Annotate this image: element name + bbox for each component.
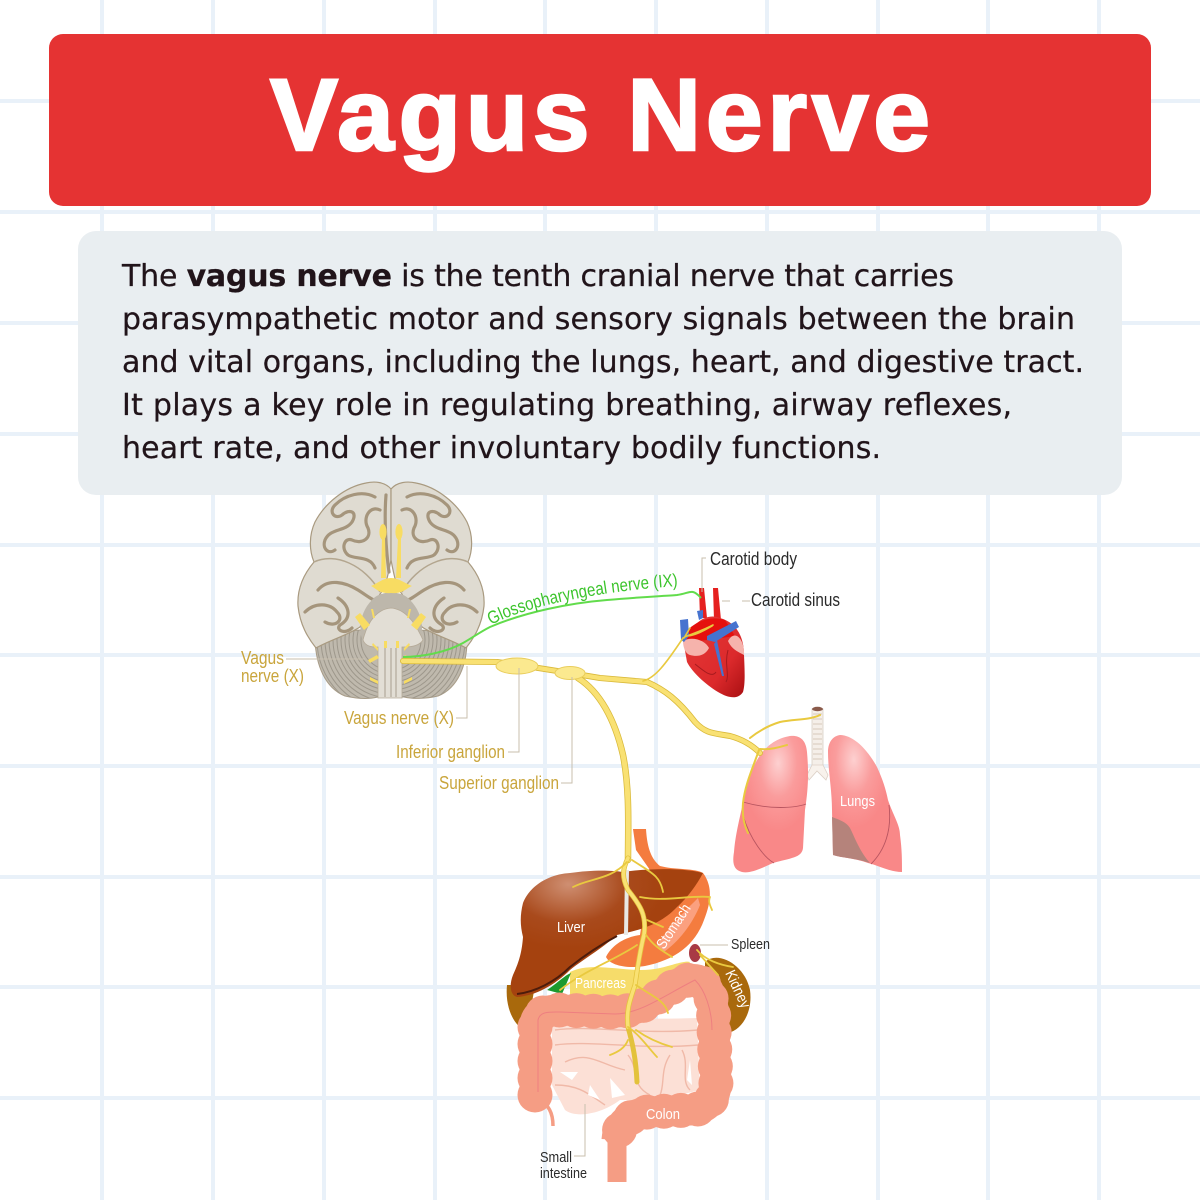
cerebrum right hemisphere bbox=[391, 482, 484, 648]
trachea bbox=[807, 707, 828, 780]
labels: vagus nerve system: Inferior ganglion bbox=[396, 742, 505, 762]
cranial nerves in yellow bbox=[355, 524, 426, 684]
panel: description bbox=[78, 231, 1122, 495]
labels: black organ labels: Small bbox=[540, 1149, 572, 1166]
labels: white organ labels: Colon bbox=[646, 1106, 680, 1123]
labels: white organ labels: Lungs bbox=[840, 793, 875, 810]
illustration: brain bbox=[298, 482, 484, 718]
pancreas bbox=[570, 962, 690, 1004]
inferior ganglion bbox=[496, 658, 538, 674]
nerve: vagus main trunk and branches bbox=[403, 625, 820, 1082]
labels: black organ labels bbox=[540, 549, 840, 1182]
labels: black organ labels: Carotid sinus bbox=[751, 590, 840, 610]
left lung bbox=[733, 736, 808, 872]
brainstem bbox=[363, 608, 423, 698]
digestive organs bbox=[507, 829, 750, 1182]
description text: parasympathetic motor and sensory signals between the brain bbox=[122, 302, 1075, 337]
label: glossopharyngeal nerve: Glossopharyngeal nerve (IX) bbox=[488, 573, 677, 623]
labels: white organ labels: Stomach bbox=[653, 901, 695, 952]
labels: vagus nerve system: Vagus nerve (X) bbox=[344, 708, 454, 728]
description text: and vital organs, including the lungs, heart, and digestive tract. bbox=[122, 345, 1084, 380]
gut trunk bbox=[624, 858, 645, 1082]
nerve: glossopharyngeal bbox=[403, 592, 701, 657]
gallbladder bbox=[547, 973, 571, 994]
labels: white organ labels: Pancreas bbox=[575, 975, 626, 992]
superior ganglion bbox=[555, 666, 585, 680]
labels: vagus nerve system: Superior ganglion bbox=[439, 773, 559, 793]
labels: vagus nerve system bbox=[241, 648, 559, 793]
heart atria bbox=[683, 635, 744, 656]
leader lines bbox=[286, 558, 750, 1156]
colon bbox=[535, 980, 716, 1182]
kidneys bbox=[507, 958, 750, 1033]
cerebellum bbox=[315, 630, 468, 699]
description text: heart rate, and other involuntary bodily functions. bbox=[122, 431, 881, 466]
labels: vagus nerve system: Vagus bbox=[241, 648, 284, 668]
hepatic vessel bbox=[626, 870, 627, 935]
title: Vagus Nerve bbox=[270, 58, 930, 172]
labels: black organ labels: intestine bbox=[540, 1165, 587, 1182]
right lung bbox=[828, 735, 902, 872]
labels: vagus nerve system: nerve (X) bbox=[241, 666, 304, 686]
labels: black organ labels: Spleen bbox=[731, 936, 770, 953]
labels: white organ labels bbox=[557, 793, 875, 1123]
labels: white organ labels: Kidney bbox=[721, 968, 754, 1011]
lungs bbox=[733, 707, 902, 872]
labels: black organ labels: Carotid body bbox=[710, 549, 797, 569]
cerebrum left hemisphere bbox=[298, 482, 391, 648]
carotid arteries bbox=[699, 588, 721, 620]
heart bbox=[680, 588, 745, 697]
title banner bbox=[49, 34, 1151, 206]
small intestine bbox=[552, 1018, 700, 1114]
liver bbox=[511, 869, 703, 997]
spleen bbox=[689, 944, 701, 962]
description text bbox=[121, 259, 1084, 466]
stomach bbox=[606, 829, 710, 967]
vagus trunk outline bbox=[403, 661, 760, 753]
description text: The vagus nerve is the tenth cranial nerve that carries bbox=[121, 259, 954, 294]
description text: It plays a key role in regulating breathing, airway reflexes, bbox=[122, 388, 1012, 423]
labels: white organ labels: Liver bbox=[557, 919, 585, 936]
